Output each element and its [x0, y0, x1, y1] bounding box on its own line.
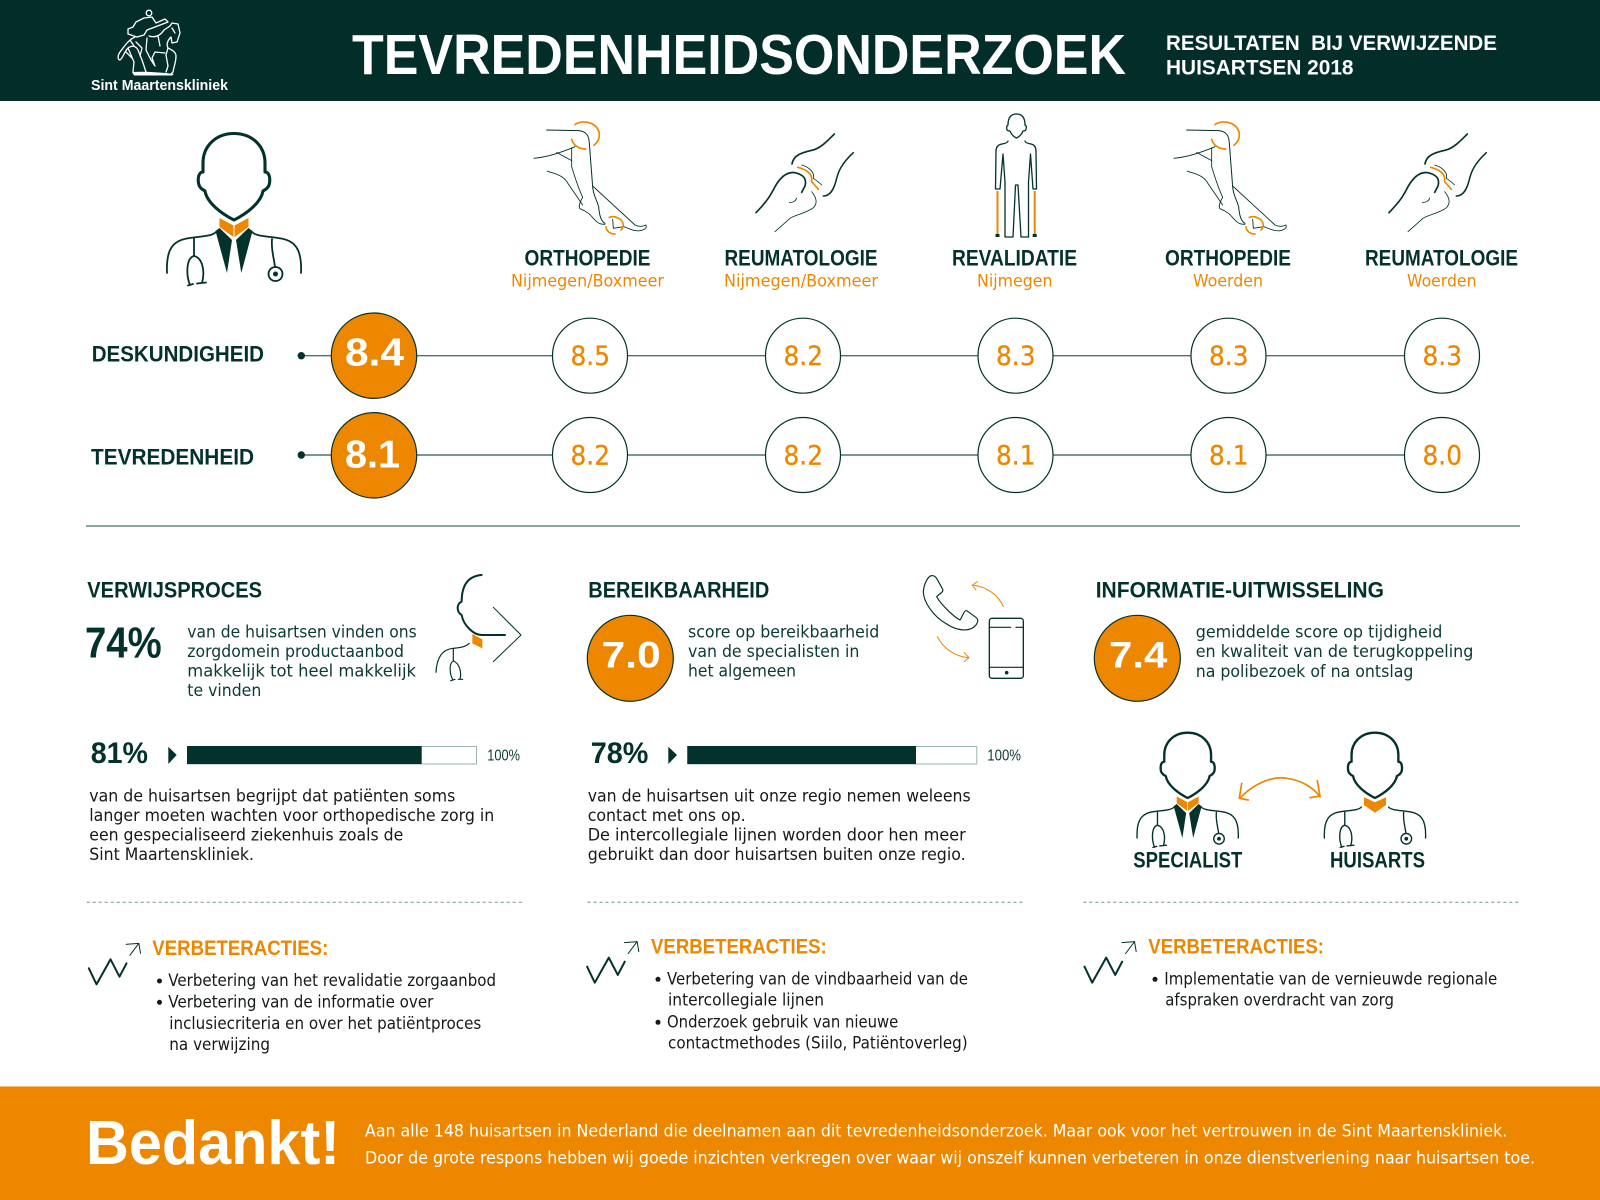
logo: Sint Maartenskliniek — [91, 10, 229, 94]
column: reumatologie Nijmegen/Boxmeer: Nijmegen/Boxmeer — [724, 272, 878, 292]
text block — [187, 622, 417, 701]
text block: van de huisartsen vinden ons — [187, 622, 417, 642]
column: revalidatie Nijmegen — [952, 114, 1077, 292]
department column headings — [511, 114, 1518, 292]
text block: na polibezoek of na ontslag — [1196, 662, 1413, 682]
progress bar 81% — [91, 737, 520, 770]
heading: BEREIKBAARHEID — [588, 578, 769, 603]
paragraph: contact met ons op. — [588, 806, 746, 826]
text block: makkelijk tot heel makkelijk — [187, 662, 416, 682]
huisarts figure — [1324, 733, 1426, 873]
text block: te vinden — [187, 681, 261, 701]
column: reumatologie Woerden: Woerden — [1407, 272, 1476, 292]
verbeteracties: contactmethodes (Siilo, Patiëntoverleg) — [668, 1033, 968, 1053]
icon: improvement zigzag — [587, 942, 639, 983]
icon: person with crutches — [996, 114, 1037, 237]
score row: tevredenheid: 8.2 — [784, 440, 823, 472]
text block: score op bereikbaarheid — [688, 622, 879, 642]
statistic 74%: 74% — [85, 619, 162, 668]
panel: bereikbaarheid — [587, 576, 1024, 1053]
column: orthopedie Woerden — [1165, 122, 1291, 292]
progress bar 78% — [591, 737, 1021, 770]
text block: van de specialisten in — [688, 642, 859, 662]
column: reumatologie Nijmegen/Boxmeer: REUMATOLOGIE — [724, 246, 878, 271]
text block: en kwaliteit van de terugkoppeling — [1196, 642, 1473, 662]
column: revalidatie Nijmegen: Nijmegen — [977, 272, 1052, 292]
text block: zorgdomein productaanbod — [187, 642, 404, 662]
column: orthopedie Nijmegen/Boxmeer — [511, 122, 664, 292]
text block: gemiddelde score op tijdigheid — [1196, 623, 1442, 643]
score row: tevredenheid: TEVREDENHEID — [91, 444, 254, 469]
verbeteracties: na verwijzing — [169, 1035, 270, 1055]
paragraph: De intercollegiale lijnen worden door hen meer — [588, 826, 966, 846]
verbeteracties — [1085, 934, 1497, 1011]
arrow: two-way exchange — [1239, 778, 1320, 800]
text block — [688, 622, 879, 682]
verbeteracties: Verbetering van de vindbaarheid van de — [667, 969, 968, 989]
text block — [1196, 623, 1473, 682]
specialist figure: SPECIALIST — [1133, 848, 1242, 873]
logo: Sint Maartenskliniek: Sint Maartenskliniek — [91, 77, 229, 94]
paragraph — [588, 787, 971, 865]
score row: deskundigheid: 8.3 — [1422, 341, 1462, 372]
icon: doctor — [167, 134, 301, 286]
column: revalidatie Nijmegen: REVALIDATIE — [952, 246, 1077, 271]
heading: VERWIJSPROCES — [87, 578, 262, 603]
paragraph: van de huisartsen uit onze regio nemen weleens — [588, 787, 971, 807]
column: reumatologie Nijmegen/Boxmeer — [724, 134, 878, 292]
progress bar 78%: 100% — [987, 748, 1021, 765]
paragraph — [89, 787, 494, 865]
score row: tevredenheid: 8.2 — [570, 440, 610, 472]
thank-you heading: Bedankt! — [86, 1109, 340, 1178]
score row: tevredenheid: 8.1 — [1209, 440, 1248, 472]
paragraph: langer moeten wachten voor orthopedische zorg in — [89, 806, 494, 826]
column: reumatologie Woerden — [1365, 134, 1518, 292]
column: orthopedie Woerden: Woerden — [1193, 272, 1263, 292]
paragraph: Sint Maartenskliniek. — [89, 845, 254, 865]
icon: improvement zigzag — [89, 943, 140, 984]
thank-you text — [365, 1122, 1535, 1167]
score circle 7.0: 7.0 — [602, 634, 661, 675]
score row: tevredenheid: 8.1 — [996, 440, 1036, 472]
icon: phone and smartphone — [923, 576, 1023, 678]
paragraph: een gespecialiseerd ziekenhuis zoals de — [89, 826, 403, 846]
panel: verwijsproces — [85, 575, 524, 1055]
verbeteracties: intercollegiale lijnen — [668, 991, 824, 1011]
thank-you text: Door de grote respons hebben wij goede inzichten verkregen over waar wij onszelf kunnen verbeteren in onze dienstverlening naar huisartsen toe. — [365, 1148, 1535, 1167]
subtitle — [1166, 32, 1497, 79]
column: orthopedie Nijmegen/Boxmeer: Nijmegen/Boxmeer — [511, 272, 664, 292]
progress bar 81%: 100% — [487, 748, 520, 765]
huisarts figure: HUISARTS — [1330, 848, 1425, 873]
score circle 7.0 — [587, 615, 673, 701]
verbeteracties: VERBETERACTIES: — [651, 934, 827, 958]
score row: deskundigheid: 8.2 — [784, 341, 823, 372]
column: reumatologie Woerden: REUMATOLOGIE — [1365, 246, 1518, 271]
score row: deskundigheid — [92, 313, 1480, 398]
verbeteracties: Onderzoek gebruik van nieuwe — [667, 1012, 898, 1032]
subtitle: RESULTATEN BIJ VERWIJZENDE — [1166, 32, 1497, 55]
header band — [0, 0, 1600, 101]
column: orthopedie Woerden: ORTHOPEDIE — [1165, 246, 1291, 271]
score circle 7.4: 7.4 — [1109, 635, 1168, 676]
icon: joint — [756, 134, 853, 232]
icon: leg with knee and ankle — [1174, 122, 1286, 234]
score circle 7.4 — [1094, 615, 1180, 701]
paragraph: gebruikt dan door huisartsen buiten onze regio. — [588, 845, 966, 865]
verbeteracties: afspraken overdracht van zorg — [1165, 991, 1394, 1011]
score row: deskundigheid: 8.4 — [345, 332, 404, 375]
verbeteracties: Verbetering van de informatie over — [168, 992, 433, 1012]
thank-you text: Aan alle 148 huisartsen in Nederland die deelnamen aan dit tevredenheidsonderzoek. Maar ook voor het vertrouwen in de Sint Maartenskliniek. — [365, 1122, 1507, 1141]
score row: tevredenheid: 8.1 — [345, 434, 400, 477]
icon: joint — [1389, 134, 1486, 232]
verbeteracties — [587, 934, 968, 1053]
icon: leg with knee and ankle — [534, 122, 646, 234]
subtitle: HUISARTSEN 2018 — [1166, 56, 1354, 79]
verbeteracties: inclusiecriteria en over het patiëntproces — [169, 1014, 481, 1034]
progress bar 78%: 78% — [591, 737, 648, 770]
verbeteracties: Implementatie van de vernieuwde regionale — [1164, 969, 1497, 989]
score row: deskundigheid: 8.5 — [570, 341, 610, 372]
verbeteracties — [89, 936, 496, 1055]
verbeteracties: VERBETERACTIES: — [1148, 934, 1324, 958]
footer band — [0, 1086, 1600, 1200]
icon: profile with arrow — [436, 575, 521, 681]
icon: improvement zigzag — [1085, 942, 1136, 983]
paragraph: van de huisartsen begrijpt dat patiënten soms — [89, 787, 455, 807]
title: TEVREDENHEIDSONDERZOEK — [352, 23, 1126, 87]
score row: deskundigheid: 8.3 — [996, 341, 1036, 372]
verbeteracties: VERBETERACTIES: — [152, 936, 328, 960]
column: orthopedie Nijmegen/Boxmeer: ORTHOPEDIE — [524, 246, 650, 271]
score row: deskundigheid: DESKUNDIGHEID — [92, 342, 264, 367]
text block: het algemeen — [688, 662, 796, 682]
verbeteracties: Verbetering van het revalidatie zorgaanbod — [168, 971, 496, 991]
progress bar 81%: 81% — [91, 737, 148, 770]
score row: tevredenheid: 8.0 — [1422, 440, 1462, 472]
specialist figure — [1133, 733, 1242, 873]
panel: informatie-uitwisseling — [1083, 578, 1520, 1011]
heading: INFORMATIE-UITWISSELING — [1096, 578, 1384, 603]
score row: deskundigheid: 8.3 — [1209, 341, 1248, 372]
score row: tevredenheid — [91, 413, 1480, 498]
